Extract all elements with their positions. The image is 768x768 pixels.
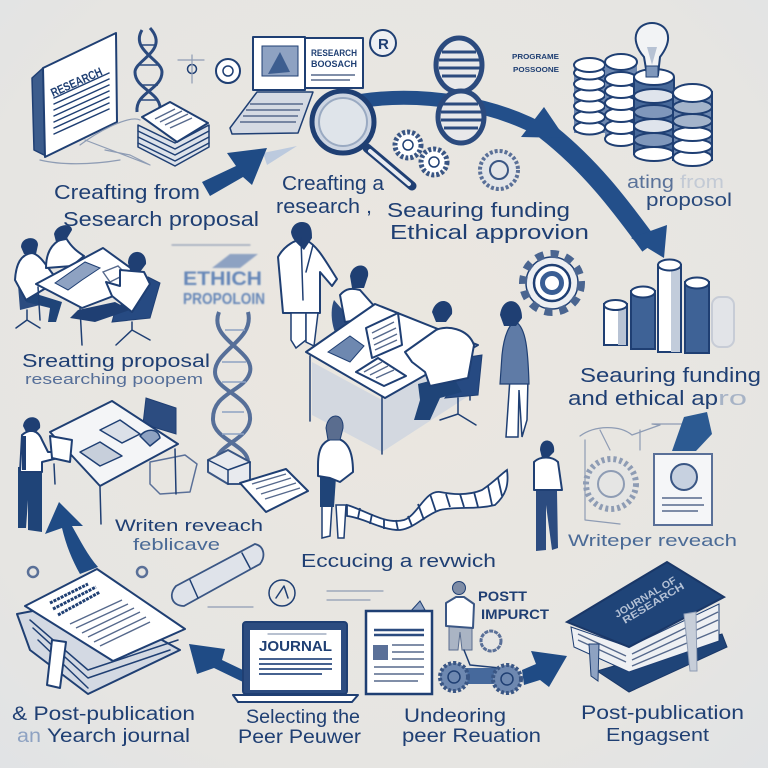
bar 1 xyxy=(604,300,627,345)
strap xyxy=(684,612,697,671)
person xyxy=(18,417,60,532)
icon: gears with connector xyxy=(440,650,521,693)
heading: faded proposal: from xyxy=(680,172,724,192)
small symbols xyxy=(28,567,295,606)
icon: laptop with research page: BOOSACH xyxy=(311,59,357,69)
icon: DNA loop xyxy=(436,38,484,143)
heading: creating proposal left xyxy=(22,351,210,388)
tiny captions xyxy=(208,591,383,607)
arrow: to the right xyxy=(522,651,567,687)
icon: sketched machine xyxy=(580,424,700,524)
bar chart xyxy=(604,260,734,353)
icon: DNA top left xyxy=(135,28,162,112)
icon: R badge xyxy=(370,30,396,56)
icon: gears pair xyxy=(395,132,447,175)
person middle xyxy=(46,225,84,268)
icon: closed book: RESEARCH xyxy=(621,581,687,627)
icon: DNA ribbon xyxy=(347,470,508,530)
heading: securing funding right: ro xyxy=(718,388,747,410)
page sheet xyxy=(356,358,406,386)
ethics proposal label: ETHICH xyxy=(183,269,262,290)
held paper xyxy=(50,436,72,462)
coin stack 3 xyxy=(634,69,674,161)
coin stack 2 xyxy=(605,54,637,146)
icon: scattered sketches near document xyxy=(40,119,150,165)
heading: crafting from research proposal xyxy=(54,182,259,231)
icon: laptop with research page xyxy=(230,37,363,134)
small caption programme: POSSOONE xyxy=(513,65,559,74)
caption: written research: feblicave xyxy=(133,535,220,554)
caption: post-publication left xyxy=(12,704,195,747)
heading: faded proposal xyxy=(627,172,732,210)
icon: closed book xyxy=(567,562,727,692)
person left xyxy=(15,238,62,322)
post impact label: POSTT xyxy=(478,588,527,604)
caption: undergoing peer evaluation: Undeoring xyxy=(404,706,506,727)
post impact label xyxy=(478,588,549,622)
scene: central desk with researchers xyxy=(306,266,482,454)
chair right xyxy=(112,277,160,345)
heading: crafting a research: Creafting a xyxy=(282,173,385,195)
icon: R badge: R xyxy=(378,36,389,53)
heading: crafting from research proposal: Sesearch proposal xyxy=(63,209,259,231)
caption: undergoing peer evaluation: peer Reuation xyxy=(402,726,541,747)
caption: post-publication engagement: Engagsent xyxy=(606,725,709,745)
chair left xyxy=(18,285,40,310)
heading: securing funding right: Seauring funding xyxy=(580,365,761,387)
icon: magnifying glass xyxy=(312,91,412,186)
chair of man xyxy=(445,355,482,398)
table xyxy=(36,248,150,345)
icon: large gear xyxy=(523,254,581,312)
icon: review sheet xyxy=(366,601,432,694)
icon: small gear xyxy=(481,631,501,651)
icon: scroll tube xyxy=(172,544,263,606)
paper on desk xyxy=(80,442,122,466)
heading: crafting a research xyxy=(276,173,385,218)
standing screen xyxy=(366,313,402,358)
scene: post impact person xyxy=(446,582,474,650)
scene: woman viewed from behind xyxy=(318,416,353,538)
arrow: blue right blob xyxy=(672,412,712,451)
bar 2 xyxy=(631,286,655,349)
heading: creating proposal left: Sreatting proposal xyxy=(22,351,210,371)
icon: box xyxy=(208,450,250,484)
document heading: RESEARCH xyxy=(49,65,104,100)
scene: standing man xyxy=(534,440,562,551)
book strap xyxy=(47,640,66,688)
caption: undergoing peer evaluation xyxy=(402,706,541,747)
floor shadow under desk xyxy=(312,352,470,452)
desk top xyxy=(306,304,478,398)
heading: securing funding ethical approval xyxy=(387,200,589,244)
caption: selecting the peer reviewer: Peer Peuwer xyxy=(238,727,362,748)
caption: post-publication left: Yearch journal xyxy=(47,726,190,747)
heading: crafting a research: research , xyxy=(276,196,372,218)
caption: post-publication engagement: Post-publication xyxy=(581,703,744,724)
caption: selecting the peer reviewer xyxy=(238,707,362,748)
pages xyxy=(571,604,719,672)
ethics proposal label xyxy=(172,245,265,308)
heading: faded proposal: proposol xyxy=(646,190,732,210)
small caption programme: PROGRAME xyxy=(512,52,559,61)
laptop page text: RESEARCH xyxy=(311,48,357,58)
arrow: curved upward on left xyxy=(45,502,98,574)
icon: open book with paper xyxy=(17,569,185,694)
icon: small circle target xyxy=(178,55,204,83)
icon: large DNA helix xyxy=(213,312,250,462)
caption: write paper research: Writeper reveach xyxy=(568,531,737,550)
heading: faded proposal: ating xyxy=(627,172,674,192)
bottom cover xyxy=(597,634,727,692)
heading: creating proposal left: researching poopem xyxy=(25,371,203,388)
caption: post-publication engagement xyxy=(581,703,744,745)
heading: crafting from research proposal: Creafting from xyxy=(54,182,200,204)
icon: research document xyxy=(32,33,117,157)
icon: journal laptop xyxy=(233,622,358,702)
heading: securing funding ethical approval: Seauring funding xyxy=(387,200,570,222)
book title: JOURNAL OF xyxy=(613,575,679,621)
icon: small circle xyxy=(216,59,240,83)
caption: selecting the peer reviewer: Selecting the xyxy=(246,707,360,728)
seated woman xyxy=(332,266,383,345)
scene: team around table xyxy=(15,225,160,345)
icon: stack of papers xyxy=(138,102,209,166)
caption: post-publication left: & Post-publication xyxy=(12,704,195,725)
arrow: upper left step xyxy=(202,146,297,196)
top cover xyxy=(567,562,724,647)
folder xyxy=(328,336,364,362)
arrow: to the left xyxy=(189,644,243,682)
small caption programme xyxy=(512,52,559,74)
bar 3 xyxy=(658,260,681,352)
man seated xyxy=(405,328,474,386)
bar 5 faint xyxy=(712,297,734,347)
icon: sheet on floor xyxy=(240,469,308,512)
ethics proposal label: PROPOLOIN xyxy=(183,291,265,308)
person right xyxy=(70,252,150,322)
heading: securing funding right xyxy=(568,365,761,410)
post impact label: IMPURCT xyxy=(481,606,549,622)
journal title: JOURNAL xyxy=(259,638,332,655)
paper heading lines xyxy=(50,584,100,615)
caption: post-publication left: an xyxy=(17,726,41,747)
coin stack 4 xyxy=(673,84,712,166)
icon: coin stacks with lightbulb xyxy=(574,23,712,166)
caption: executing a review: Eccucing a revwich xyxy=(301,551,496,571)
desk top xyxy=(50,401,178,486)
heading: securing funding ethical approval: Ethical approvion xyxy=(390,222,589,244)
big curved arrow xyxy=(360,98,667,258)
scene: woman standing right xyxy=(500,301,529,437)
caption: written research xyxy=(115,516,263,554)
cardboard box xyxy=(150,455,197,494)
scene: left desk with person xyxy=(18,398,197,532)
legs xyxy=(54,449,176,524)
bar 4 xyxy=(685,278,709,353)
icon: lightbulb xyxy=(636,23,668,77)
man pants xyxy=(414,375,462,420)
icon: report page xyxy=(654,454,712,525)
chair xyxy=(143,398,176,434)
scene: doctor in lab coat xyxy=(278,222,337,348)
heading: securing funding right: and ethical ap xyxy=(568,388,718,410)
desk legs xyxy=(310,352,470,454)
icon: sketched gear xyxy=(480,151,518,189)
ribbon xyxy=(589,644,599,681)
caption: written research: Writen reveach xyxy=(115,516,263,535)
coin stack 1 xyxy=(574,58,605,134)
